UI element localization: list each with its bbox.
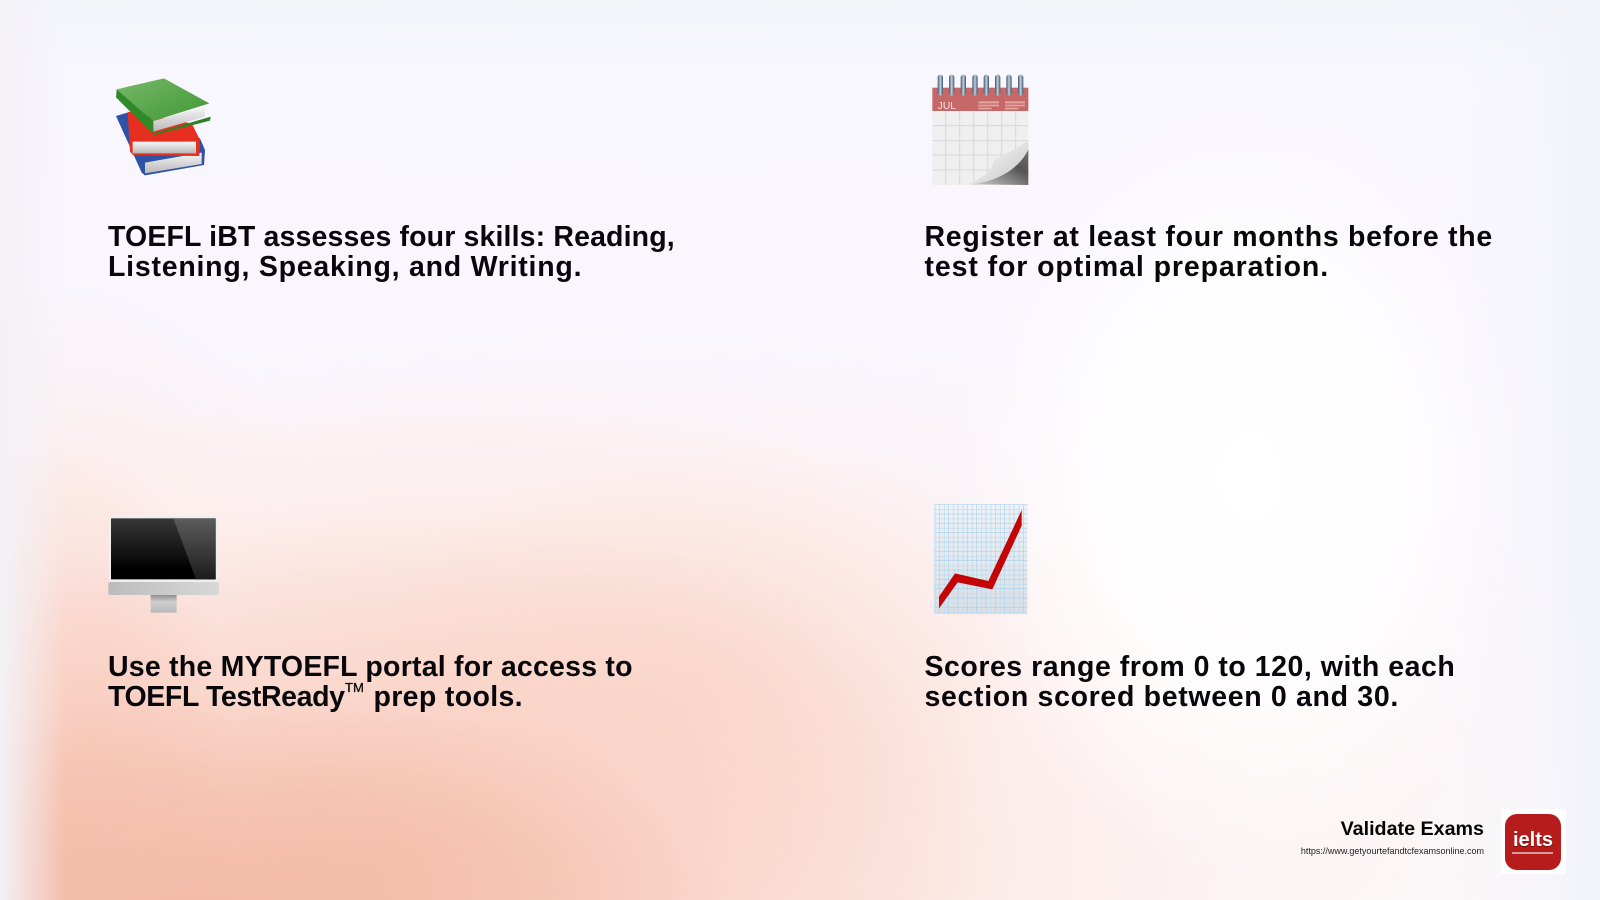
text: registration: Register at least four months before the xyxy=(924,220,1493,252)
logo: ielts xyxy=(1501,809,1566,874)
text: four skills: TOEFL iBT assesses four skills: Reading, xyxy=(108,220,675,252)
text: registration xyxy=(924,220,1493,282)
brand name: Validate Exams xyxy=(1341,818,1484,840)
text: four skills xyxy=(108,220,675,282)
text: MYTOEFL portal: Use the MYTOEFL portal for access to xyxy=(108,650,633,682)
text: MYTOEFL portal xyxy=(108,650,633,712)
text: scores: Scores range from 0 to 120, with each xyxy=(924,650,1455,682)
text: MYTOEFL portal: prep tools. xyxy=(374,680,523,712)
text: MYTOEFL portal: TM xyxy=(345,680,364,694)
text: registration: test for optimal preparation. xyxy=(924,250,1329,282)
website url: https://www.getyourtefandtcfexamsonline.com xyxy=(1301,846,1484,856)
text: four skills: Listening, Speaking, and Writing. xyxy=(108,250,582,282)
icon: desktop computer xyxy=(108,516,219,613)
icon: chart increasing xyxy=(934,504,1028,614)
text: MYTOEFL portal: TOEFL TestReady xyxy=(108,680,345,712)
icon: calendar xyxy=(932,74,1028,185)
logo: ielts: ielts xyxy=(1513,829,1553,851)
text: scores xyxy=(924,650,1455,712)
text: scores: section scored between 0 and 30. xyxy=(924,680,1399,712)
month label: JUL xyxy=(938,101,956,112)
icon: books xyxy=(116,78,211,176)
